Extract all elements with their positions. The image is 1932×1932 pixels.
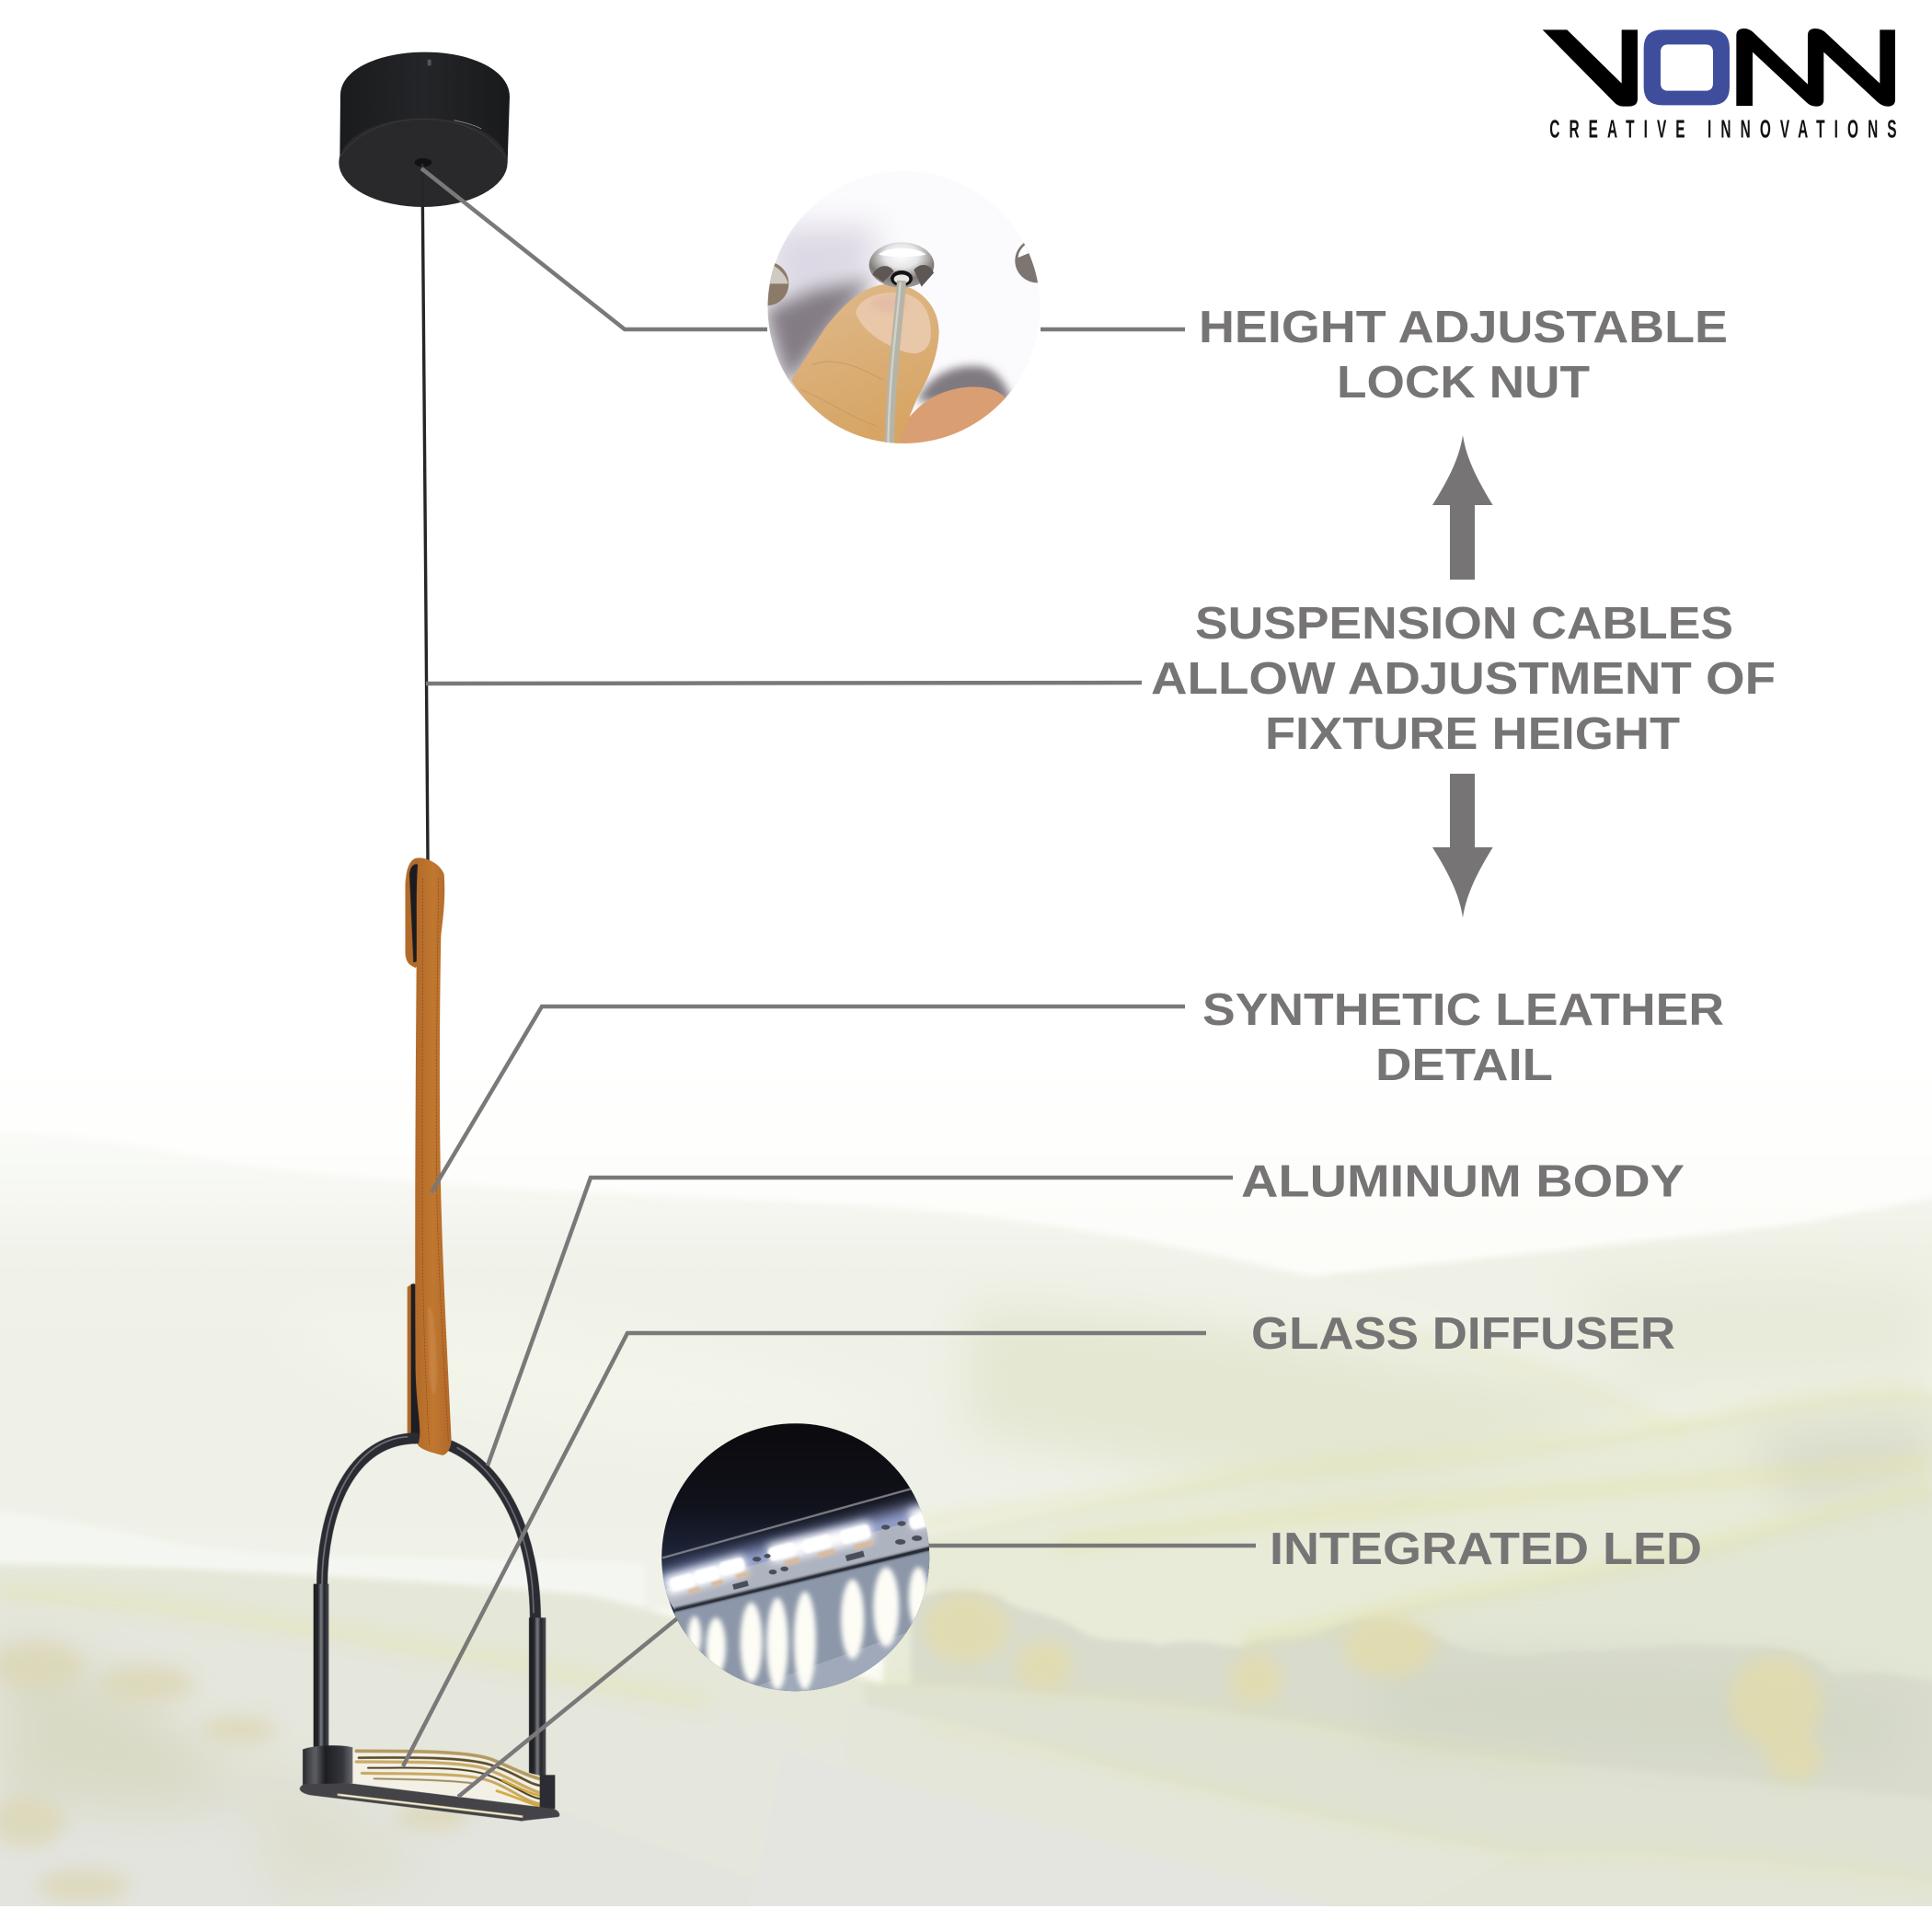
label: synthetic leather detail: DETAIL — [1375, 1041, 1553, 1090]
leader line: integrated LED to fixture — [458, 1616, 681, 1797]
label: height adjustable lock nut: LOCK NUT — [1337, 358, 1590, 408]
reflection streaks — [688, 1567, 928, 1690]
leader line: integrated LED to label — [925, 1544, 1256, 1547]
thumb — [791, 283, 939, 448]
label: suspension cables: ALLOW ADJUSTMENT OF — [1151, 654, 1776, 704]
logo letters N N — [1736, 29, 1895, 107]
photo inset: integrated LED strip — [656, 1420, 938, 1702]
label: suspension cables: SUSPENSION CABLES — [1195, 599, 1733, 649]
thumbnail — [856, 293, 931, 353]
glow — [656, 1513, 936, 1589]
leader line: aluminum body — [488, 1178, 1233, 1466]
logo: Vonn Creative Innovations — [1543, 29, 1897, 144]
background: hazy rolling hills landscape — [0, 1142, 1932, 1906]
leader line: suspension cables — [426, 683, 1142, 684]
label: synthetic leather detail — [1202, 985, 1724, 1090]
finger shadow — [917, 366, 1012, 402]
base plate with light slot — [300, 1783, 559, 1821]
label: suspension cables — [1151, 599, 1776, 759]
pendant light fixture — [300, 52, 559, 1821]
leader line: synthetic leather — [431, 1006, 1185, 1192]
label: integrated LED: INTEGRATED LED — [1270, 1524, 1702, 1574]
label: synthetic leather detail: SYNTHETIC LEATHER — [1202, 985, 1724, 1035]
logo tagline: CREATIVE INNOVATIONS — [1549, 115, 1897, 144]
arrow up — [1432, 435, 1493, 580]
left nut — [767, 263, 789, 305]
rear leather flaps — [406, 857, 423, 1441]
foreground hills — [885, 1687, 905, 1710]
edge line — [662, 1489, 911, 1558]
circuit board — [662, 1515, 936, 1610]
golden foliage — [925, 1593, 1822, 1781]
cable — [890, 281, 902, 448]
left base cup — [303, 1745, 352, 1785]
LEDs — [669, 1511, 938, 1594]
right base cup — [540, 1775, 555, 1809]
photo inset: lock nut being adjusted — [767, 207, 1038, 443]
right nut — [1015, 243, 1038, 283]
soft shading and highlights — [0, 1274, 1932, 1904]
board lower edge — [674, 1547, 936, 1610]
suspension cable — [422, 164, 428, 860]
label: height adjustable lock nut: HEIGHT ADJUSTABLE — [1199, 303, 1728, 352]
main leather strap — [415, 857, 452, 1455]
reflection surface — [674, 1548, 936, 1699]
label: aluminum body: ALUMINUM BODY — [1241, 1157, 1685, 1207]
right tube sleeve — [529, 1617, 546, 1776]
label: glass diffuser: GLASS DIFFUSER — [1251, 1309, 1675, 1359]
board components — [732, 1521, 922, 1590]
right lit hill — [881, 1397, 1932, 1685]
LED halos — [665, 1513, 932, 1587]
lower finger — [894, 386, 1006, 443]
tree band — [911, 1590, 1932, 1812]
left tube sleeve — [314, 1584, 328, 1748]
ceiling canopy — [339, 52, 510, 207]
logo letter V — [1543, 29, 1638, 107]
leader line: lock nut to label — [1041, 328, 1185, 331]
glass diffuser — [352, 1750, 540, 1807]
collar — [891, 270, 913, 286]
chrome nut — [869, 242, 934, 288]
logo letter O — [1644, 29, 1730, 105]
left yellow lit slope — [0, 1593, 1564, 1932]
leader line: lock nut to canopy — [421, 168, 767, 329]
leader line: glass diffuser — [403, 1333, 1206, 1766]
aluminum arch body — [300, 1437, 559, 1821]
arrow down — [1432, 774, 1493, 918]
label: height adjustable lock nut — [1199, 303, 1728, 408]
left middle hill — [0, 1563, 874, 1737]
label: suspension cables: FIXTURE HEIGHT — [1265, 709, 1680, 759]
